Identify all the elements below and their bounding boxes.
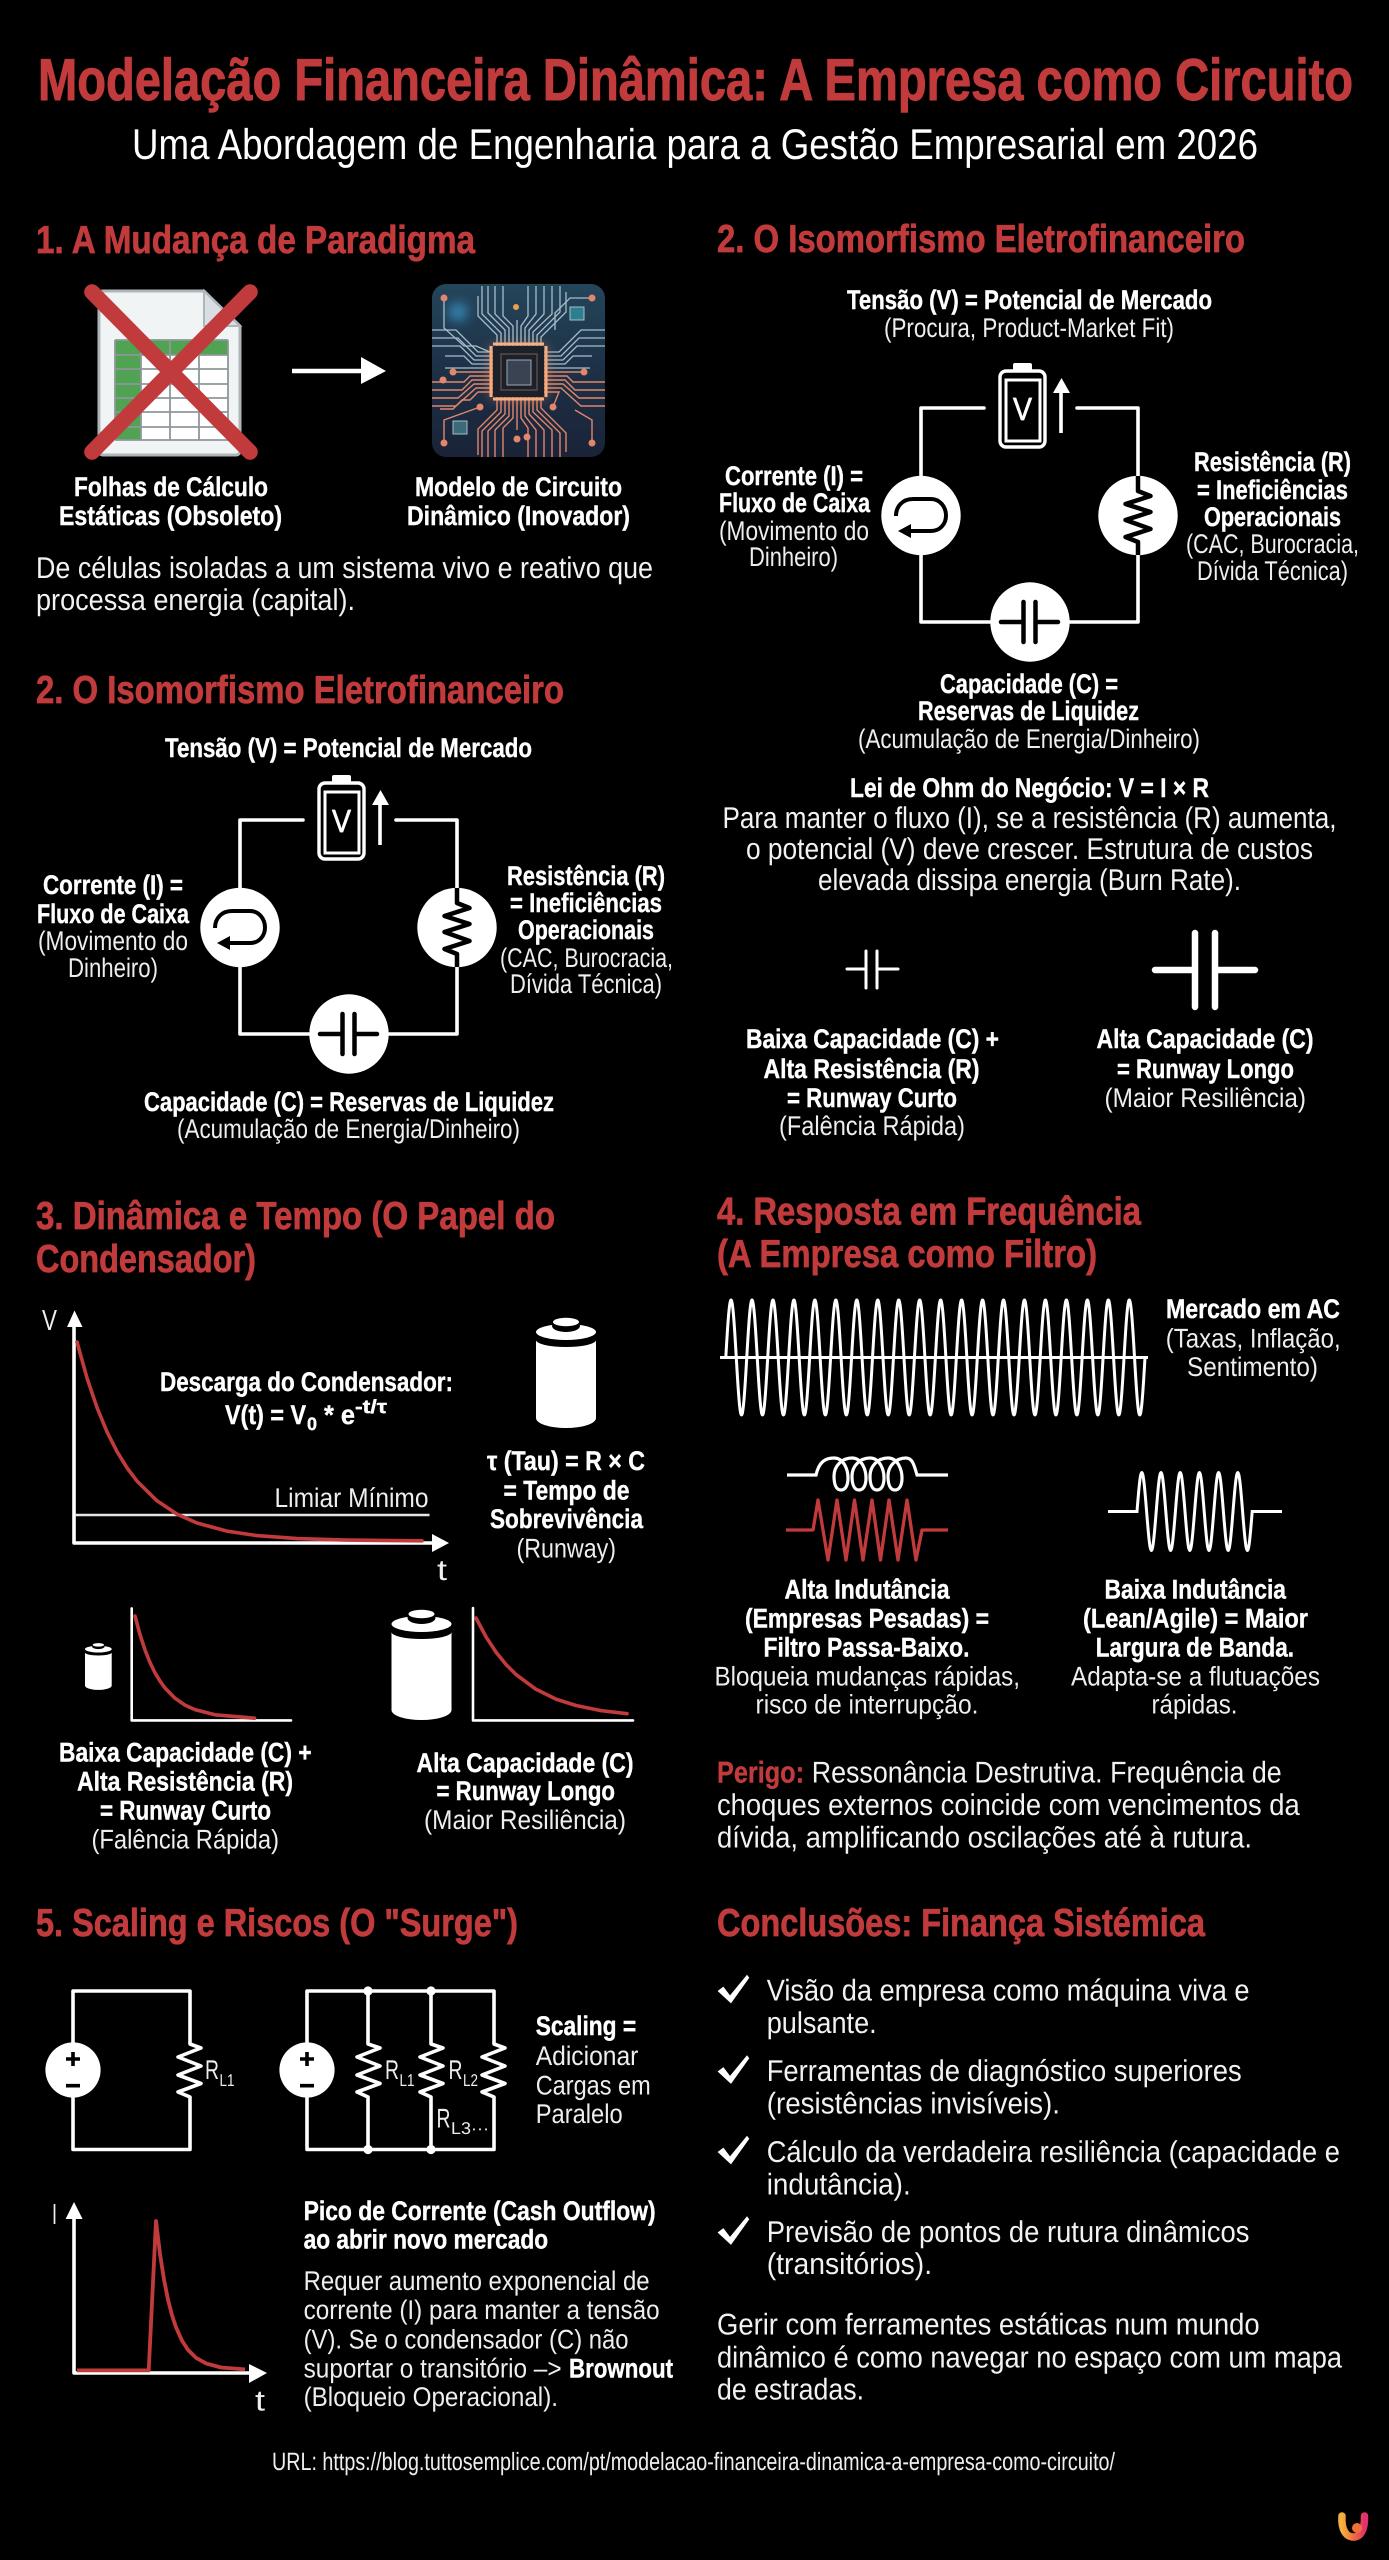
label: current: Dinheiro) [749, 542, 838, 572]
formula: capacitor discharge: 0 [307, 1414, 317, 1434]
text block: current peak: Pico de Corrente (Cash Outflow) [304, 2196, 656, 2226]
text block: scaling definition: Adicionar [536, 2041, 638, 2071]
label: AC market: Sentimento) [1187, 1352, 1318, 1382]
label: resistance: Operacionais [1204, 502, 1341, 532]
circuit: parallel loads: L2 [463, 2071, 478, 2090]
chart: current spike: t [255, 2386, 265, 2418]
label: voltage: Tensão (V) = Potencial de Mercado [165, 733, 532, 763]
icon: small capacitor [847, 951, 898, 988]
label: resistance [500, 861, 673, 999]
text block: closing statement: Gerir com ferramentes estáticas num mundo [717, 2308, 1260, 2341]
heading: section 4 [717, 1190, 1141, 1276]
caption: circuit model [407, 472, 630, 531]
text block: low inductance: Adapta-se a flutuações [1071, 1662, 1320, 1692]
chart: capacitor discharge [42, 1305, 449, 1587]
caption: spreadsheets [59, 472, 282, 531]
text block: current peak: (V). Se o condensador (C) não [304, 2324, 629, 2354]
caption: long runway: (Maior Resiliência) [424, 1805, 626, 1835]
label: resistance: (CAC, Burocracia, [500, 943, 673, 973]
text block: scaling definition: Cargas em [536, 2070, 651, 2100]
text block: current peak: suportar o transitório –> [304, 2354, 562, 2384]
panel: section 2 isomorphism, right [717, 218, 1359, 1141]
caption: long runway: = Runway Longo [436, 1776, 615, 1806]
circuit: parallel loads [279, 1986, 505, 2154]
label: voltage: Tensão (V) = Potencial de Mercado [847, 285, 1212, 315]
panel: section 1 paradigm shift [36, 219, 653, 617]
caption: high capacitance: (Maior Resiliência) [1104, 1083, 1306, 1113]
caption: high capacitance: = Runway Longo [1117, 1054, 1294, 1084]
checklist item 1: pulsante. [767, 2007, 877, 2040]
label: resistance: Resistência (R) [1194, 447, 1351, 477]
chart: AC market wave [720, 1300, 1148, 1415]
text block: paradigm summary [36, 552, 653, 617]
text block: current peak [304, 2196, 673, 2412]
text block: Ohm's law: Lei de Ohm do Negócio: V = I × R [850, 773, 1209, 803]
label: capacitance: Capacidade (C) = [940, 669, 1118, 699]
formula: capacitor discharge: -t/τ [355, 1397, 388, 1418]
text block: tau: τ (Tau) = R × C [487, 1446, 645, 1476]
circuit: single load [45, 1991, 235, 2150]
caption: low capacitance: = Runway Curto [787, 1083, 957, 1113]
label: AC market [1166, 1294, 1341, 1382]
caption: short runway: = Runway Curto [100, 1796, 271, 1826]
circuit diagram left [200, 775, 497, 1074]
heading: conclusions: Conclusões: Finança Sistémica [717, 1902, 1205, 1945]
chart: current spike [52, 2199, 267, 2418]
checklist item 3 [718, 2136, 1340, 2201]
caption: short runway: Alta Resistência (R) [77, 1766, 293, 1796]
heading: section 2 left: 2. O Isomorfismo Eletrofinanceiro [36, 669, 564, 712]
text block: high inductance: risco de interrupção. [756, 1690, 978, 1720]
circuit diagram left: V [332, 803, 352, 839]
panel: section 3 dynamics and time [36, 1195, 645, 1854]
label: resistance: Dívida Técnica) [510, 969, 662, 999]
circuit diagram right: V [1013, 391, 1033, 427]
text block: scaling definition: Scaling = [536, 2011, 636, 2041]
heading: section 4: 4. Resposta em Frequência [717, 1190, 1141, 1234]
label: capacitance: Capacidade (C) = Reservas de Liquidez [144, 1087, 554, 1117]
checklist item 2: Ferramentas de diagnóstico superiores [767, 2055, 1242, 2088]
label: resistance: = Ineficiências [510, 888, 662, 918]
panel: section 5 scaling and risks [36, 1902, 673, 2418]
chart: capacitor discharge: V [42, 1305, 58, 1337]
caption: short runway [59, 1738, 312, 1854]
text block: tau: (Runway) [516, 1534, 616, 1564]
text block: scaling definition [536, 2011, 651, 2129]
text block: paradigm summary: processa energia (capital). [36, 584, 355, 617]
caption: circuit model: Dinâmico (Inovador) [407, 501, 630, 531]
heading: section 4: (A Empresa como Filtro) [717, 1233, 1097, 1276]
label: current: (Movimento do [38, 926, 188, 956]
formula: capacitor discharge: * e [324, 1400, 355, 1430]
text block: closing statement: dinâmico é como navegar no espaço com um mapa [717, 2341, 1342, 2374]
chart: filtered red wave [786, 1500, 948, 1560]
checklist item 1 [718, 1975, 1250, 2040]
caption: long runway: Alta Capacidade (C) [416, 1748, 634, 1778]
label: current: Corrente (I) = [725, 461, 863, 491]
text block: tau: Sobrevivência [490, 1504, 644, 1534]
label: capacitance [858, 669, 1200, 754]
label: capacitance: Reservas de Liquidez [918, 696, 1139, 726]
icon: crossed-out spreadsheet [92, 291, 250, 455]
icon: logo [1342, 2516, 1365, 2537]
label: current: Corrente (I) = [43, 870, 183, 900]
heading: section 5: 5. Scaling e Riscos (O "Surge") [36, 1902, 518, 1945]
callout: destructive resonance [717, 1756, 1300, 1854]
heading: section 3: Condensador) [36, 1238, 256, 1281]
callout: destructive resonance: Ressonância Destrutiva. Frequência de [812, 1756, 1282, 1790]
panel: section 4 frequency response [714, 1190, 1341, 1854]
checklist item 4 [718, 2216, 1250, 2281]
checklist item 2: (resistências invisíveis). [767, 2088, 1060, 2120]
label: voltage [847, 285, 1212, 343]
text block: Ohm's law: elevada dissipa energia (Burn Rate). [818, 864, 1241, 897]
label: AC market: Mercado em AC [1166, 1294, 1340, 1324]
label: resistance: Resistência (R) [507, 861, 665, 891]
text block: low inductance: rápidas. [1152, 1690, 1238, 1720]
checklist item 4: (transitórios). [767, 2248, 932, 2281]
caption: short runway: (Falência Rápida) [92, 1824, 279, 1854]
text block: tau: = Tempo de [504, 1476, 630, 1506]
circuit: parallel loads: R [385, 2055, 399, 2085]
text block: high inductance: Filtro Passa-Baixo. [764, 1632, 970, 1662]
label: capacitance: (Acumulação de Energia/Dinheiro) [177, 1114, 520, 1144]
heading: section 3: 3. Dinâmica e Tempo (O Papel do [36, 1195, 555, 1238]
text block: current peak: corrente (I) para manter a tensão [304, 2295, 660, 2325]
callout: destructive resonance: dívida, amplificando oscilações até à rutura. [717, 1822, 1252, 1854]
text block: paradigm summary: De células isoladas a um sistema vivo e reativo que [36, 552, 653, 585]
checklist item 1: Visão da empresa como máquina viva e [767, 1975, 1250, 2008]
text block: closing statement: de estradas. [717, 2374, 864, 2406]
checklist item 2 [718, 2055, 1242, 2120]
caption: low capacitance [746, 1024, 999, 1141]
icon: circuit chip [432, 284, 605, 457]
icon: small cylinder [85, 1643, 112, 1690]
label: current: Fluxo de Caixa [719, 488, 871, 518]
text block: current peak: Requer aumento exponencial de [304, 2266, 650, 2296]
label: capacitance: (Acumulação de Energia/Dinheiro) [858, 724, 1200, 754]
source URL: URL: https://blog.tuttosemplice.com/pt/modelacao-financeira-dinamica-a-empresa-como-circuito/ [272, 2448, 1115, 2476]
text block: low inductance [1071, 1574, 1320, 1720]
callout: destructive resonance: choques externos coincide com vencimentos da [717, 1789, 1300, 1822]
label: current [719, 461, 871, 572]
caption: high capacitance [1096, 1024, 1314, 1113]
checklist item 3: Cálculo da verdadeira resiliência (capacidade e [767, 2136, 1340, 2169]
checklist item 3: indutância). [767, 2168, 911, 2201]
label: voltage: (Procura, Product-Market Fit) [884, 313, 1174, 343]
icon: large capacitor cylinder [536, 1318, 596, 1428]
arrow: spreadsheet to circuit [292, 357, 386, 384]
text block: high inductance [714, 1574, 1020, 1720]
text block: low inductance: Baixa Indutância [1104, 1574, 1287, 1604]
caption: high capacitance: Alta Capacidade (C) [1096, 1024, 1314, 1054]
text block: high inductance: Alta Indutância [784, 1574, 950, 1604]
text block: current peak: (Bloqueio Operacional). [304, 2382, 558, 2412]
label: resistance [1186, 447, 1359, 586]
heading: section 1: 1. A Mudança de Paradigma [36, 219, 475, 262]
chart: capacitor discharge: Limiar Mínimo [274, 1483, 428, 1513]
label: current: Dinheiro) [68, 953, 158, 983]
circuit: parallel loads: R [448, 2055, 462, 2085]
circuit: parallel loads: L3··· [451, 2119, 489, 2138]
icon: inductor coil [787, 1458, 948, 1490]
circuit: parallel loads: R [436, 2104, 450, 2134]
label: resistance: Dívida Técnica) [1197, 556, 1348, 586]
label: resistance: Operacionais [518, 915, 654, 945]
checklist item 4: Previsão de pontos de rutura dinâmicos [767, 2216, 1250, 2249]
circuit diagram right [881, 363, 1178, 662]
label: resistance: = Ineficiências [1197, 475, 1348, 505]
text block: tau [487, 1446, 645, 1564]
circuit: single load: L1 [220, 2071, 234, 2090]
heading: section 2 right: 2. O Isomorfismo Eletrofinanceiro [717, 218, 1245, 261]
icon: large capacitor [1155, 933, 1255, 1007]
circuit: single load: R [205, 2055, 219, 2085]
caption: spreadsheets: Folhas de Cálculo [74, 472, 268, 502]
text block: scaling definition: Paralelo [536, 2099, 623, 2129]
chart: slow discharge [473, 1608, 633, 1720]
caption: low capacitance: (Falência Rápida) [779, 1111, 965, 1141]
caption: short runway: Baixa Capacidade (C) + [59, 1738, 312, 1768]
label: current [37, 870, 190, 983]
callout: destructive resonance: Perigo: [717, 1756, 804, 1790]
text block: low inductance: (Lean/Agile) = Maior [1083, 1604, 1308, 1634]
text block: Ohm's law: o potencial (V) deve crescer. Estrutura de custos [746, 833, 1313, 866]
text block: current peak: Brownout [569, 2354, 673, 2384]
panel: conclusions [717, 1902, 1342, 2406]
text block: Ohm's law [722, 773, 1336, 897]
formula: capacitor discharge [160, 1367, 453, 1434]
icon: big cylinder [392, 1610, 452, 1720]
caption: circuit model: Modelo de Circuito [415, 472, 622, 502]
caption: long runway [416, 1748, 634, 1835]
chart: fast discharge [132, 1608, 291, 1720]
caption: spreadsheets: Estáticas (Obsoleto) [59, 501, 282, 531]
formula: capacitor discharge: V(t) = V [225, 1400, 306, 1430]
label: capacitance [144, 1087, 554, 1144]
text block: current peak: ao abrir novo mercado [304, 2224, 548, 2254]
label: current: Fluxo de Caixa [37, 899, 190, 929]
text block: high inductance: (Empresas Pesadas) = [745, 1604, 989, 1634]
chart: capacitor discharge: t [437, 1555, 447, 1587]
circuit: parallel loads: L1 [400, 2071, 414, 2090]
label: AC market: (Taxas, Inflação, [1166, 1324, 1341, 1354]
text block: low inductance: Largura de Banda. [1096, 1632, 1294, 1662]
formula: capacitor discharge: Descarga do Condensador: [160, 1367, 453, 1397]
chart: low-inductance white wave [1108, 1472, 1282, 1550]
text block: closing statement [717, 2308, 1342, 2406]
caption: low capacitance: Alta Resistência (R) [764, 1054, 980, 1084]
panel: section 2 isomorphism, left [36, 669, 673, 1144]
chart: current spike: I [52, 2199, 57, 2231]
caption: low capacitance: Baixa Capacidade (C) + [746, 1024, 999, 1054]
heading: section 3 [36, 1195, 555, 1281]
text block: high inductance: Bloqueia mudanças rápidas, [714, 1662, 1020, 1692]
label: current: (Movimento do [719, 516, 869, 546]
